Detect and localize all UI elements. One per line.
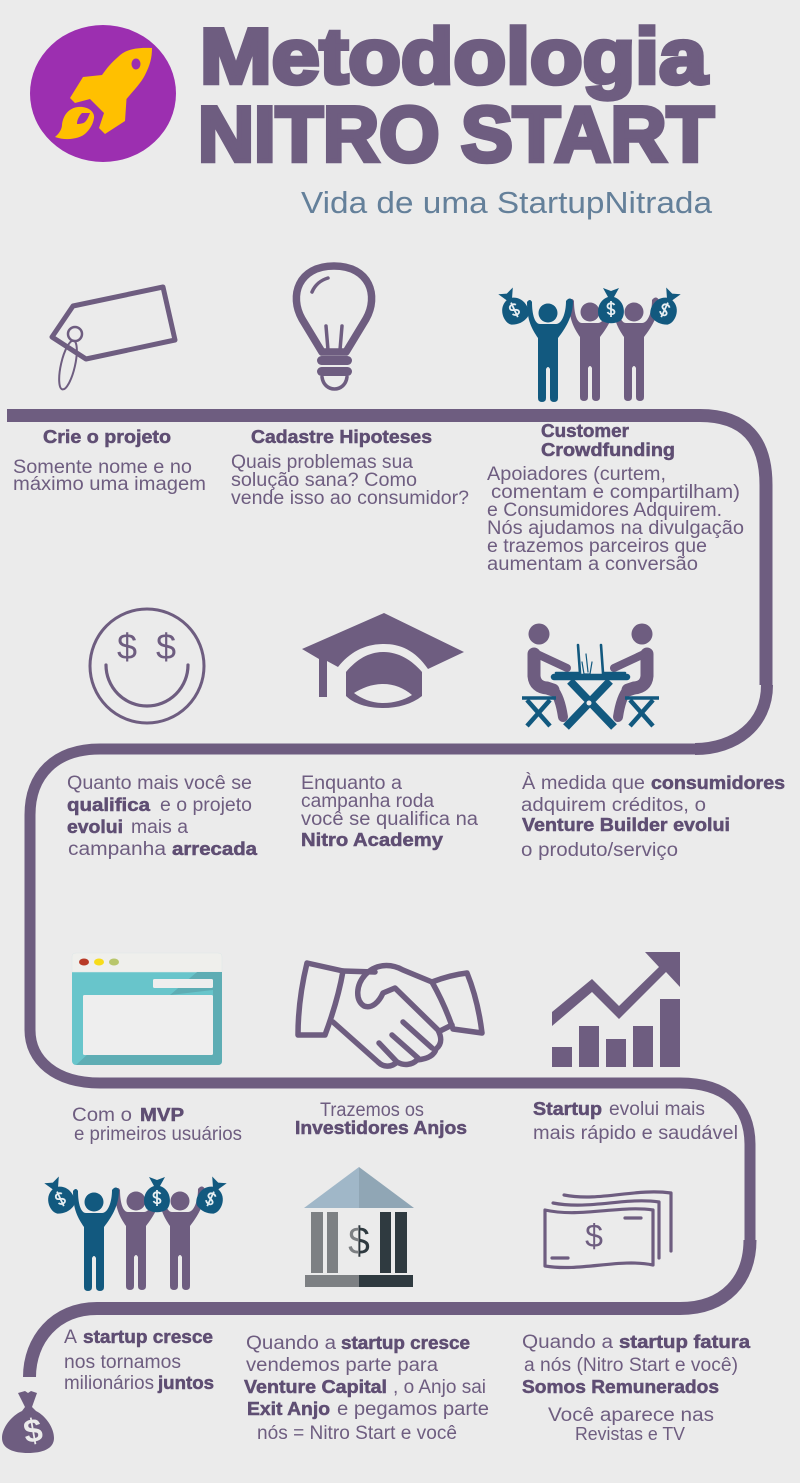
icon: bank building bbox=[304, 1167, 414, 1287]
step: Nitro Academy bbox=[301, 773, 478, 850]
step: A startup cresce: milionários bbox=[64, 1373, 154, 1394]
step: Cadastre Hipoteses: Quais problemas sua bbox=[231, 452, 413, 473]
step: qualificacao e arrecadacao: mais a bbox=[131, 817, 188, 838]
icon: browser window MVP bbox=[72, 953, 222, 1065]
step: Investidores Anjos: Trazemos os bbox=[320, 1100, 424, 1121]
step: Somos Remunerados: Quando a bbox=[522, 1332, 613, 1353]
icon: smiley with dollar eyes bbox=[90, 609, 204, 723]
step: Venture Capital and Exit Anjo: startup cresce bbox=[341, 1333, 470, 1353]
step: MVP bbox=[72, 1105, 242, 1145]
step: Nitro Academy: você se qualifica na bbox=[301, 809, 478, 830]
step: Customer Crowdfunding: Nós ajudamos na divulgação bbox=[487, 518, 744, 539]
step: Cadastre Hipoteses: Cadastre Hipoteses bbox=[251, 427, 432, 447]
icon: crowd with money bags bbox=[494, 285, 685, 402]
icon: crowd with money bags (second) bbox=[40, 1174, 231, 1291]
step: Venture Capital and Exit Anjo: e pegamos parte bbox=[337, 1399, 489, 1420]
step: Venture Builder bbox=[521, 773, 785, 861]
step: Crie o projeto: Somente nome e no bbox=[13, 457, 192, 478]
step: Nitro Academy: Enquanto a bbox=[301, 773, 402, 794]
step: Crie o projeto: Crie o projeto bbox=[43, 427, 171, 447]
step: Startup evolui: mais rápido e saudável bbox=[533, 1123, 738, 1144]
journey path line bbox=[7, 416, 767, 1377]
title: Metodologia bbox=[200, 12, 708, 100]
step: Customer Crowdfunding: e Consumidores Adquirem. bbox=[487, 500, 722, 521]
step: A startup cresce bbox=[64, 1327, 214, 1394]
step: Nitro Academy: Nitro Academy bbox=[301, 830, 443, 850]
step: Somos Remunerados: startup fatura bbox=[619, 1332, 751, 1352]
step: A startup cresce: nos tornamos bbox=[64, 1352, 181, 1373]
step: Somos Remunerados: Você aparece nas bbox=[548, 1405, 714, 1426]
icon: graduation cap bbox=[302, 613, 464, 708]
icon: smiley with dollar eyes: $ bbox=[117, 626, 137, 667]
step: MVP: Com o bbox=[72, 1105, 132, 1126]
step: Investidores Anjos bbox=[295, 1100, 467, 1138]
step: qualificacao e arrecadacao: campanha bbox=[68, 839, 166, 860]
step: qualificacao e arrecadacao: e o projeto bbox=[160, 795, 252, 816]
icon: stack of bills: $ bbox=[585, 1218, 603, 1254]
step: Cadastre Hipoteses bbox=[231, 427, 469, 509]
icon: two people at a table with laptops bbox=[522, 624, 659, 727]
icon: stack of bills bbox=[545, 1192, 671, 1268]
step: Startup evolui: Startup bbox=[533, 1099, 602, 1119]
step: Somos Remunerados bbox=[522, 1332, 751, 1444]
icon: light bulb bbox=[296, 266, 372, 389]
step: Somos Remunerados: Somos Remunerados bbox=[522, 1377, 719, 1397]
step: A startup cresce: A bbox=[64, 1327, 77, 1348]
step: Venture Builder: Venture Builder evolui bbox=[522, 815, 730, 835]
step: Customer Crowdfunding: Apoiadores (curtem, bbox=[487, 464, 666, 485]
step: Venture Builder: o produto/serviço bbox=[521, 840, 678, 861]
title: NITRO START bbox=[198, 90, 714, 178]
step: Cadastre Hipoteses: solução sana? Como bbox=[231, 470, 417, 491]
step: Venture Builder: consumidores bbox=[651, 773, 785, 793]
icon: money bag at end of path bbox=[2, 1391, 54, 1453]
step: Somos Remunerados: Revistas e TV bbox=[575, 1424, 685, 1444]
icon: price tag bbox=[52, 287, 175, 391]
step: Startup evolui: evolui mais bbox=[609, 1099, 705, 1120]
step: Venture Capital and Exit Anjo: Exit Anjo bbox=[247, 1399, 330, 1419]
step: Startup evolui bbox=[533, 1099, 738, 1144]
step: Venture Capital and Exit Anjo: vendemos parte para bbox=[246, 1355, 438, 1376]
logo: purple circle with rocket bbox=[30, 25, 176, 162]
icon: growth chart with arrow bbox=[552, 952, 680, 1067]
step: Venture Capital and Exit Anjo: nós = Nitro Start e você bbox=[257, 1423, 457, 1444]
step: Somos Remunerados: a nós (Nitro Start e você) bbox=[524, 1355, 738, 1376]
step: qualificacao e arrecadacao: qualifica bbox=[67, 795, 151, 815]
step: qualificacao e arrecadacao bbox=[67, 773, 258, 860]
step: Customer Crowdfunding: comentam e compartilham) bbox=[491, 482, 740, 503]
step: Venture Capital and Exit Anjo: Venture Capital bbox=[244, 1377, 387, 1397]
step: Venture Builder: À medida que bbox=[522, 773, 645, 794]
step: A startup cresce: juntos bbox=[157, 1373, 214, 1393]
step: Customer Crowdfunding: Customer bbox=[541, 421, 629, 441]
step: Crie o projeto bbox=[13, 427, 206, 495]
step: Cadastre Hipoteses: vende isso ao consumidor? bbox=[231, 488, 469, 509]
step: Venture Capital and Exit Anjo: , o Anjo sai bbox=[393, 1377, 486, 1398]
step: Customer Crowdfunding bbox=[487, 421, 744, 575]
icon: smiley with dollar eyes: $ bbox=[156, 626, 176, 667]
step: Venture Capital and Exit Anjo: Quando a bbox=[246, 1333, 336, 1354]
step: Customer Crowdfunding: Crowdfunding bbox=[541, 440, 675, 460]
step: MVP: MVP bbox=[140, 1105, 184, 1125]
step: qualificacao e arrecadacao: evolui bbox=[67, 817, 123, 837]
step: Venture Builder: adquirem créditos, o bbox=[521, 795, 706, 816]
icon: bank building: $ bbox=[348, 1220, 370, 1263]
step: A startup cresce: startup cresce bbox=[83, 1327, 213, 1347]
icon: handshake bbox=[298, 963, 482, 1066]
step: MVP: e primeiros usuários bbox=[74, 1124, 242, 1145]
step: Investidores Anjos: Investidores Anjos bbox=[295, 1118, 467, 1138]
step: Crie o projeto: máximo uma imagem bbox=[13, 474, 206, 495]
step: Venture Capital and Exit Anjo bbox=[244, 1333, 489, 1444]
icon: money bag at end of path: $ bbox=[21, 1411, 45, 1450]
step: qualificacao e arrecadacao: arrecada bbox=[172, 839, 258, 859]
title bbox=[198, 12, 714, 178]
step: qualificacao e arrecadacao: Quanto mais você se bbox=[67, 773, 252, 794]
step: Nitro Academy: campanha roda bbox=[301, 791, 434, 812]
step: Customer Crowdfunding: e trazemos parceiros que bbox=[487, 536, 707, 557]
step: Customer Crowdfunding: aumentam a conversão bbox=[487, 554, 698, 575]
subtitle: Vida de uma StartupNitrada bbox=[301, 185, 713, 220]
